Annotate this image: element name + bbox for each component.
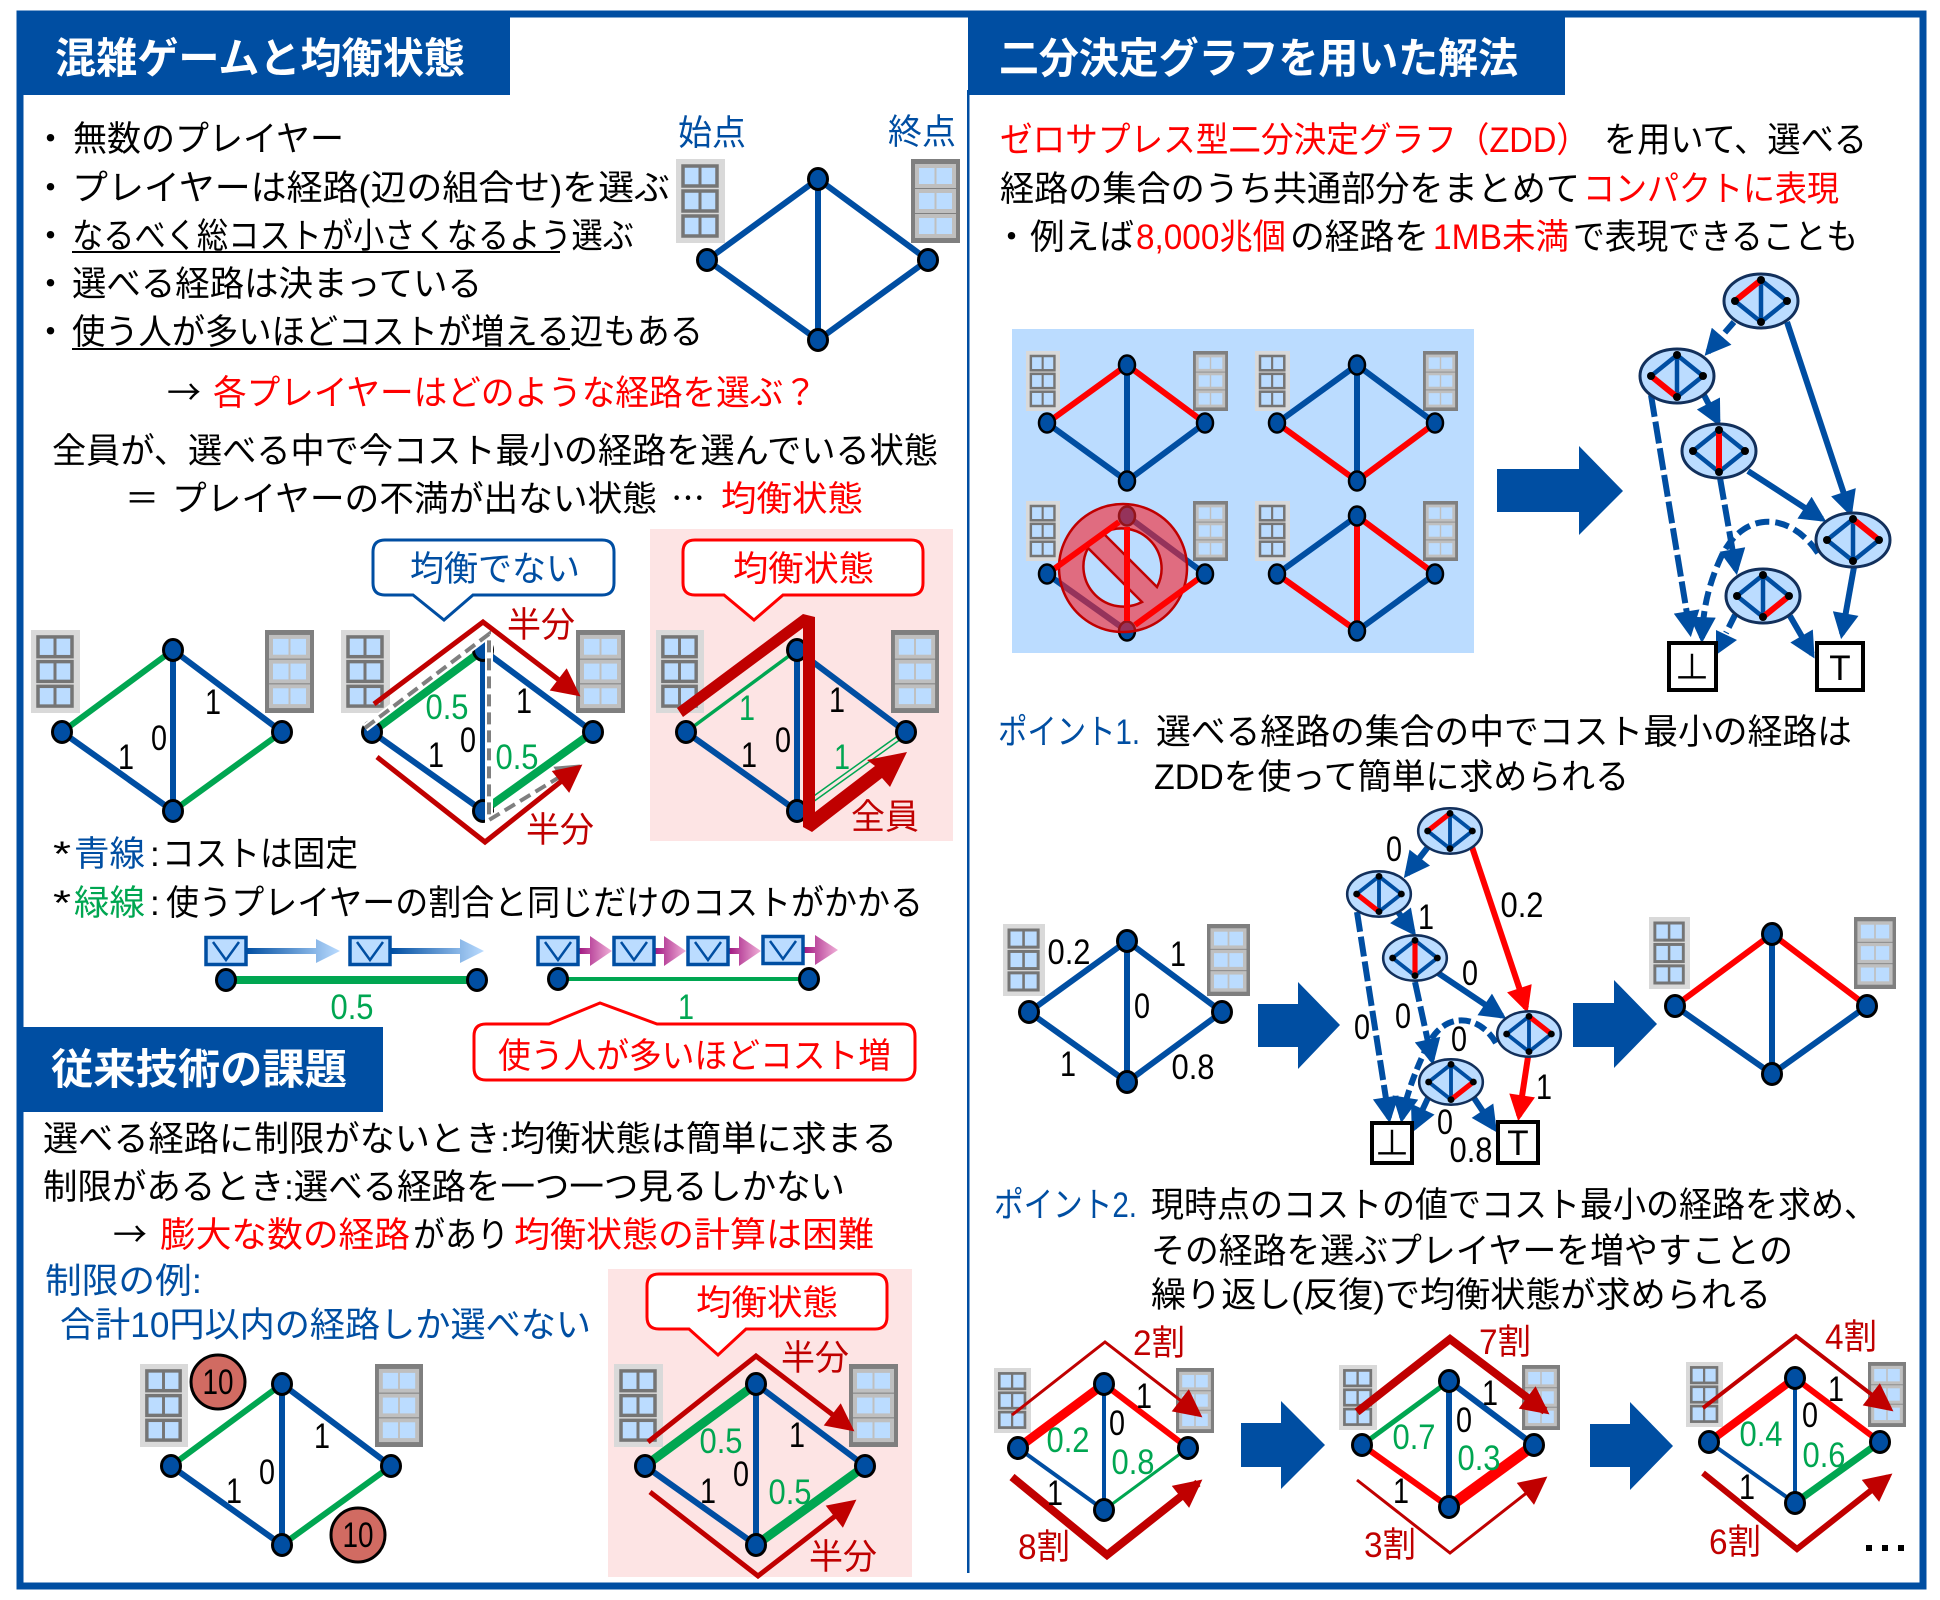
text block: assumptions [33,120,703,352]
text block: ZDD intro: ゼロサプレス型二分決定グラフ（ZDD） [1000,121,1589,160]
graph: equilibrium: 1 [834,738,850,777]
question text: → [167,365,201,416]
graph: cost input [1003,924,1250,1092]
weighted node 2 [1347,871,1411,917]
graph: constrained equilibrium: 半分 [809,1538,877,1577]
graph: equilibrium: 1 [829,681,845,720]
graph: constraint network: 10 [202,1363,234,1402]
edge weights: 1 [1536,1068,1552,1107]
diagram: many users, cost 1 [538,935,838,1027]
graph: iteration 2: 0 [1456,1401,1472,1440]
graph: iteration 3 [1686,1318,1906,1562]
text block: ZDD intro: 例えば [1030,218,1134,257]
graph: iteration 3: 6割 [1709,1523,1761,1562]
text block: assumptions: ・ [33,120,68,159]
text block: constraint example: 制限の例: [45,1262,202,1301]
graph: iteration 1: 0.8 [1112,1443,1154,1482]
edge weights: 0 [1462,954,1478,993]
graph: iteration 2: 3割 [1364,1526,1416,1565]
diagram: many users, cost 1: 1 [678,988,694,1027]
edge weights: 0.2 [1500,886,1544,925]
terminal top [1817,643,1863,690]
graph: constrained equilibrium: 半分 [781,1339,849,1378]
graph: start and end points: 始点 [678,114,746,153]
text block: assumptions: なるべく総コストが小さくなるよう選ぶ [72,217,634,256]
text block: point 2: ポイント2. [994,1186,1137,1225]
graph: constraint network: 0 [259,1453,275,1492]
graph: network with costs: 1 [118,738,134,777]
text block: point 1: ZDDを使って簡単に求められる [1154,758,1629,797]
text block: assumptions: 選べる経路は決まっている [72,265,482,304]
panel: existing issue [17,1027,912,1577]
text block: assumptions: プレイヤーは経路(辺の組合せ)を選ぶ [72,169,670,208]
edge weights: 0.8 [1450,1131,1492,1170]
text block: assumptions: 無数のプレイヤー [73,120,344,159]
text block: point 2: その経路を選ぶプレイヤーを増やすことの [1151,1232,1793,1271]
panel: constrained equilibrium [608,1269,912,1577]
ellipsis [1866,1545,1904,1551]
weighted node 5 [1419,1059,1483,1105]
graph: iteration 1: 8割 [1018,1528,1070,1567]
terminal top: T [1507,1124,1529,1163]
graph: cost input: 1 [1170,935,1186,974]
graph: iteration 2 [1339,1323,1560,1565]
text block: assumptions: ・ [33,313,68,352]
graph: iteration 1: 2割 [1133,1324,1185,1363]
text block: point 1: ポイント1. [998,713,1140,752]
diagram: weighted ZDD [1347,808,1561,1170]
graph: constrained equilibrium [614,1339,898,1577]
callout: equilibrium: 均衡状態 [696,1284,838,1323]
graph: start and end points: 終点 [888,113,956,152]
graph: equilibrium: 全員 [851,798,919,837]
ZDD node 4 [1816,513,1890,567]
graph: constraint network: 10 [342,1516,374,1555]
text block: point 2 [994,1186,1877,1315]
question text: 各プレイヤーはどのような経路を選ぶ？ [213,374,817,413]
graph: network with costs: 0 [151,719,167,758]
terminal bottom: ⊥ [1674,649,1710,688]
weighted node 1 [1418,808,1482,854]
callout: not equilibrium: 均衡でない [410,550,580,589]
graph: equilibrium: 1 [741,736,757,775]
diagram: few users, cost 0.5: 0.5 [330,988,374,1027]
text block: constraint difficulty: 均衡状態の計算は困難 [514,1216,874,1255]
terminal top [1498,1122,1538,1163]
text block: ZDD intro: 経路の集合のうち共通部分をまとめて [1000,170,1580,209]
text block: ZDD intro: で表現できることも [1573,218,1858,257]
legend text: コストは固定 [162,835,358,874]
graph: iteration 3: 0 [1802,1396,1818,1435]
callout: not equilibrium [373,540,614,620]
graph: iteration 2: 0.7 [1392,1418,1436,1457]
callout: cost grows with users [474,1003,915,1080]
graph: allowed path B [1255,351,1458,490]
edge weights: 0 [1437,1103,1453,1142]
graph: iteration 3: 0.4 [1740,1415,1782,1454]
ZDD node 2 [1640,349,1714,403]
text block: assumptions: ・ [33,169,68,208]
heading: existing issue: 従来技術の課題 [51,1046,347,1093]
graph: iteration 3: 1 [1739,1468,1755,1507]
graph: constrained equilibrium: 0.5 [768,1473,812,1512]
text block: point 2: 現時点のコストの値でコスト最小の経路を求め、 [1151,1186,1877,1225]
edge weights: 0 [1395,997,1411,1036]
panel: path set [1012,329,1474,653]
arrow: to shortest path [1573,980,1657,1068]
terminal bottom [1669,643,1716,690]
graph: allowed path A [1026,351,1228,490]
heading: ZDD method [968,11,1565,95]
graph: iteration 3: 4割 [1825,1318,1877,1357]
callout: cost grows with users: 使う人が多いほどコスト増 [498,1037,891,1076]
graph: non-equilibrium flows: 半分 [526,811,594,850]
graph: non-equilibrium flows: 0 [460,721,476,760]
graph: non-equilibrium flows: 0.5 [426,688,468,727]
graph: iteration 3: 0.6 [1802,1436,1846,1475]
graph: constrained equilibrium: 0 [733,1455,749,1494]
graph: constraint network [140,1355,423,1562]
text block: constraint example [45,1262,591,1345]
equilibrium definition: ＝ [125,480,159,519]
graph: iteration 2: 1 [1482,1374,1498,1413]
graph: non-equilibrium flows: 半分 [507,606,575,645]
legend text: * [53,835,71,874]
graph: cost input: 0.2 [1048,933,1090,972]
heading: congestion game [17,11,510,95]
graph: non-equilibrium flows [341,606,625,850]
graph: equilibrium: 0 [775,721,791,760]
graph: iteration 1: 1 [1136,1377,1152,1416]
equilibrium definition: 全員が、選べる中で今コスト最小の経路を選んでいる状態 [52,432,938,471]
graph: iteration 1: 0 [1109,1404,1125,1443]
column divider [967,90,970,1573]
panel: equilibrium example [650,529,953,841]
graph: iteration 1: 1 [1047,1474,1063,1513]
weighted node 4 [1497,1011,1561,1057]
legend text: 青線 [74,835,145,874]
ZDD node 5 [1726,569,1800,623]
heading: congestion game: 混雑ゲームと均衡状態 [55,35,465,82]
graph: allowed path D [1255,501,1458,640]
arrow: next iteration [1590,1402,1673,1490]
graph: constrained equilibrium: 0.5 [700,1422,742,1461]
callout: equilibrium [647,1274,887,1355]
graph: non-equilibrium flows: 1 [516,682,532,721]
graph: minimum path [1649,917,1896,1084]
graph: forbidden path C [1026,501,1228,640]
legend text: * [53,884,71,923]
text block: constraint difficulty: 制限があるとき:選べる経路を一つ一つ見るしかない [43,1168,845,1207]
graph: iteration 3: 1 [1828,1370,1844,1409]
graph: constraint network: 1 [314,1417,330,1456]
graph: non-equilibrium flows: 1 [428,736,444,775]
heading: existing issue [17,1027,383,1112]
text block: ZDD intro [994,121,1867,257]
text block: ZDD intro: の経路を [1290,218,1429,257]
edge weights [1354,830,1552,1170]
text block: ZDD intro: を用いて、選べる [1604,121,1867,160]
graph: iteration 1: 0.2 [1046,1421,1090,1460]
diagram: ZDD [1640,274,1890,690]
panel: ZDD solution [968,11,1906,1567]
graph: constrained equilibrium: 1 [700,1472,716,1511]
graph: equilibrium: 1 [739,689,755,728]
legend text: : [150,884,160,923]
edge weights: 1 [1418,898,1434,937]
text block: ZDD intro: ・ [994,218,1029,257]
text block: ZDD intro: コンパクトに表現 [1583,170,1839,209]
panel: congestion game [17,11,960,1080]
terminal top: T [1829,649,1851,688]
graph: non-equilibrium flows: 0.5 [496,738,538,777]
icon: prohibited [1059,504,1187,632]
equilibrium definition: プレイヤーの不満が出ない状態 [172,480,657,519]
text block: ZDD intro: 8,000兆個 [1136,218,1286,257]
graph: network with costs [31,630,314,822]
text block: point 1 [998,713,1852,797]
text block: constraint difficulty: があり [413,1216,509,1255]
callout: equilibrium [683,540,923,620]
text block: constraint example: 合計10円以内の経路しか選べない [60,1306,591,1345]
equilibrium definition: 均衡状態 [721,480,863,519]
question text [167,365,817,416]
heading: ZDD method: 二分決定グラフを用いた解法 [999,35,1518,82]
graph: cost input: 0 [1134,987,1150,1026]
text block: constraint difficulty [43,1120,897,1258]
arrow: to weighted ZDD [1258,982,1340,1069]
arrow: to ZDD [1497,446,1623,535]
text block: constraint difficulty: 選べる経路に制限がないとき:均衡状態は簡単に求まる [43,1120,897,1159]
legend text: : [150,835,160,874]
callout: equilibrium: 均衡状態 [733,550,874,589]
graph: iteration 2: 1 [1393,1472,1409,1511]
ZDD node 3 [1682,424,1756,478]
graph: constraint network: 1 [226,1472,242,1511]
text block: assumptions: 使う人が多いほどコストが増える辺もある [72,313,703,352]
graph: network with costs: 1 [205,683,221,722]
graph: equilibrium [656,614,939,837]
legend text: 緑線 [74,884,145,923]
text block: assumptions: ・ [33,217,68,256]
text block: point 2: 繰り返し(反復)で均衡状態が求められる [1151,1276,1771,1315]
diagram: few users, cost 0.5 [206,938,486,1027]
ZDD node 1 [1724,274,1798,328]
arrow: next iteration [1241,1401,1325,1489]
text block: point 1: 選べる経路の集合の中でコスト最小の経路は [1156,713,1852,752]
graph: iteration 2: 7割 [1479,1323,1531,1362]
graph: start and end points [676,113,960,350]
legend text: 使うプレイヤーの割合と同じだけのコストがかかる [166,884,923,923]
graph: cost input: 1 [1060,1045,1076,1084]
legend text [53,835,923,923]
equilibrium definition [52,432,938,522]
edge weights: 0 [1451,1020,1467,1059]
graph: iteration 1 [994,1324,1214,1567]
equilibrium definition: ⋯ [671,471,705,522]
terminal bottom: ⊥ [1374,1125,1410,1164]
edge weights: 0 [1386,830,1402,869]
text block: constraint difficulty: → [113,1207,147,1258]
text block: assumptions: ・ [33,265,68,304]
edge weights: 0 [1354,1008,1370,1047]
graph: constrained equilibrium: 1 [789,1416,805,1455]
graph: iteration 2: 0.3 [1458,1439,1500,1478]
text block: ZDD intro: 1MB未満 [1433,218,1569,257]
graph: cost input: 0.8 [1172,1048,1214,1087]
text block: constraint difficulty: 膨大な数の経路 [160,1216,410,1255]
weighted node 3 [1383,935,1447,981]
